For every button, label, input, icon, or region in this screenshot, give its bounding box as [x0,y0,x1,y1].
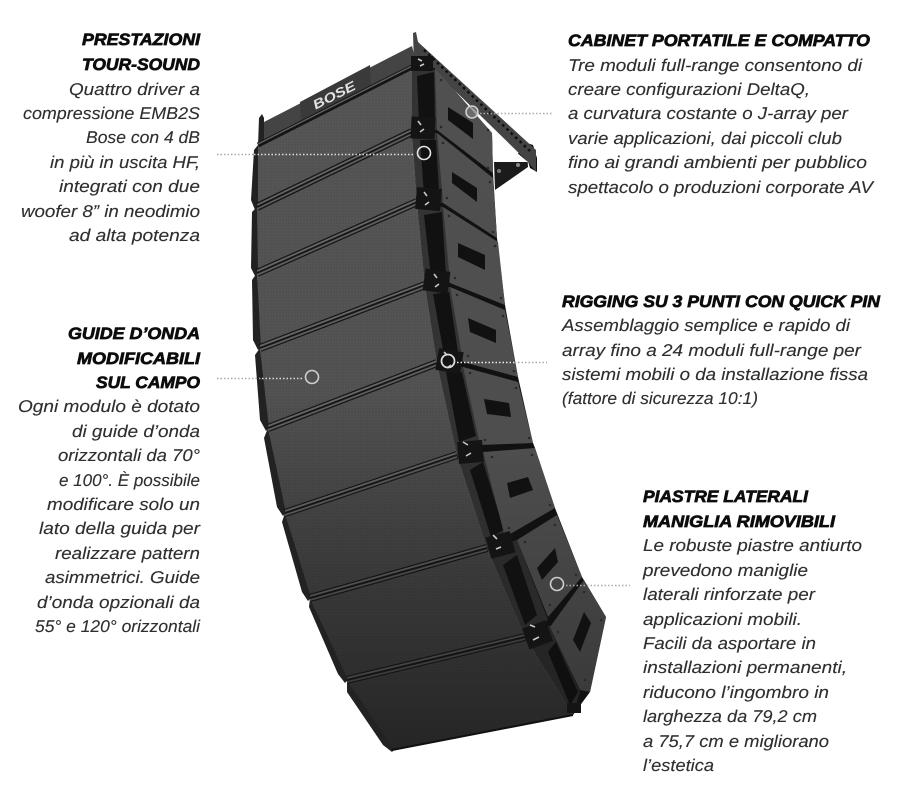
text block: piastre laterali [642,488,862,775]
text block: cabinet portatile: varie applicazioni, dai piccoli club [568,129,842,148]
text block: guide d'onda: GUIDE D’ONDA [68,325,200,343]
text block: prestazioni tour-sound: Bose con 4 dB [86,128,200,147]
dark backing of side [412,67,606,715]
text block: guide d'onda: d’onda opzionali da [37,593,200,612]
text block: rigging: Assemblaggio semplice e rapido di [561,316,851,335]
text block: rigging: sistemi mobili o da installazione fissa [562,365,868,384]
text block: prestazioni tour-sound: integrati con due [59,177,200,196]
text block: prestazioni tour-sound: Quattro driver a [69,80,200,99]
text block: rigging: (fattore di sicurezza 10:1) [562,389,758,408]
text block: guide d'onda: 55° e 120° orizzontali [35,617,201,636]
callout: piastre [550,578,630,590]
handle slots [448,107,591,652]
text block: piastre laterali: l’estetica [643,756,714,775]
left edge brackets [251,145,394,752]
text block: piastre laterali: larghezza da 79,2 cm [643,707,817,726]
text block: guide d'onda: MODIFICABILI [77,350,200,368]
callout: cabinet [466,106,552,118]
text block: rigging: RIGGING SU 3 PUNTI CON QUICK PIN [562,293,881,311]
horizontal rails [257,66,573,750]
top cap [258,46,417,146]
text block: cabinet portatile [568,32,875,197]
top rigging bar [413,32,536,172]
rear rigging bracket [494,143,537,190]
text block: piastre laterali: PIASTRE LATERALI [643,488,808,506]
text block: guide d'onda: orizzontali da 70° [58,446,200,465]
text block: cabinet portatile: spettacolo o produzioni corporate AV [568,178,875,197]
text block: rigging [561,293,881,408]
text block: guide d'onda: SUL CAMPO [96,374,200,392]
text block: prestazioni tour-sound: woofer 8” in neodimio [21,202,200,221]
text block: guide d'onda: di guide d’onda [72,422,200,441]
callout: prestazioni [217,146,430,160]
text block: cabinet portatile: creare configurazioni DeltaQ, [568,80,810,99]
text block: guide d'onda: Ogni modulo è dotato [18,397,200,416]
text block: guide d'onda: lato della guida per [39,519,201,538]
text block: prestazioni tour-sound: ad alta potenza [69,226,200,245]
text block: piastre laterali: installazioni permanenti, [643,658,847,677]
text block: prestazioni tour-sound: in più in uscita HF, [50,153,200,172]
side column with recessed handles [412,67,580,715]
callout: guide d'onda [217,370,318,384]
text block: cabinet portatile: fino ai grandi ambienti per pubblico [568,153,867,172]
text block: piastre laterali: laterali rinforzate per [643,585,816,604]
text block: piastre laterali: prevedono maniglie [642,561,808,580]
speaker array [251,32,606,752]
text block: cabinet portatile: CABINET PORTATILE E COMPATTO [568,32,870,50]
text block: prestazioni tour-sound: compressione EMB2S [23,104,201,123]
text block: guide d'onda: e 100°. È possibile [59,471,200,490]
text block: piastre laterali: MANIGLIA RIMOVIBILI [643,513,835,531]
text block: rigging: array fino a 24 moduli full-range per [562,341,862,360]
text block: cabinet portatile: a curvatura costante o J-array per [568,104,849,123]
text block: guide d'onda: realizzare pattern [55,544,200,563]
text block: guide d'onda: modificare solo un [47,495,200,514]
text block: piastre laterali: Le robuste piastre antiurto [643,536,862,555]
BOSE logo: BOSE [310,78,358,112]
text block: prestazioni tour-sound [21,31,201,245]
text block: prestazioni tour-sound: PRESTAZIONI [82,31,200,49]
text block: piastre laterali: Facili da asportare in [643,634,816,653]
side plates [435,68,606,692]
text block: piastre laterali: applicazioni mobili. [643,610,802,629]
text block: guide d'onda: asimmetrici. Guide [45,568,200,587]
callout: rigging [442,354,547,368]
front grille faces [257,67,573,750]
text block: cabinet portatile: Tre moduli full-range consentono di [568,56,863,75]
text block: piastre laterali: riducono l’ingombro in [643,683,829,702]
text block: prestazioni tour-sound: TOUR-SOUND [82,56,200,74]
rigging joints [410,56,581,713]
text block: guide d'onda [18,325,201,636]
plate screws [440,79,602,681]
text block: piastre laterali: a 75,7 cm e migliorano [643,732,829,751]
